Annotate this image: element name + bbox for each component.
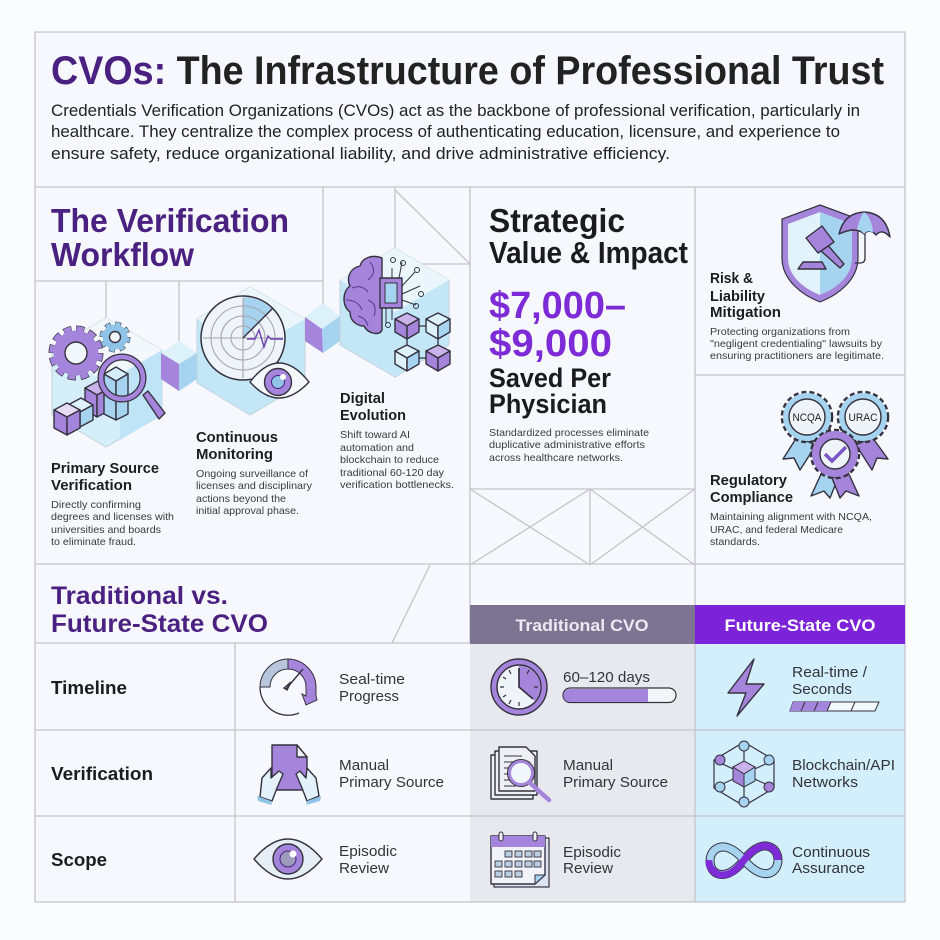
text: regulatory compliance: URAC, and federal Medicare <box>710 524 843 536</box>
text: risk and liability mitigation: Liability <box>710 289 765 305</box>
text: digital evolution: automation and <box>340 442 414 454</box>
table header: traditional CVO <box>470 605 695 644</box>
text: episodic review: Episodic <box>339 843 398 860</box>
text: digital evolution <box>340 391 454 491</box>
text: blockchain api networks: Blockchain/API <box>792 757 895 774</box>
title: CVOs: The Infrastructure of Professional Trust <box>51 49 884 93</box>
icon: accreditation badges: URAC <box>848 412 878 424</box>
stat: dollars saved per physician: Saved Per <box>489 363 611 393</box>
table header: traditional CVO: Traditional CVO <box>516 616 648 635</box>
text: continuous assurance: Assurance <box>792 860 865 877</box>
text: blockchain api networks <box>792 757 895 791</box>
stat: 60-120 days bar <box>563 669 676 702</box>
stat: real-time seconds <box>790 664 879 711</box>
heading: the verification workflow: The Verification <box>51 202 289 239</box>
text: risk and liability mitigation <box>710 271 884 362</box>
icon: connector cube two <box>305 303 340 353</box>
text: risk and liability mitigation: Mitigation <box>710 305 781 321</box>
text: risk and liability mitigation: ensuring practitioners are legitimate. <box>710 350 884 362</box>
panel: traditional column background <box>470 644 695 902</box>
text: manual primary source, traditional: Primary Source <box>563 774 668 791</box>
text: digital evolution: Shift toward AI <box>340 429 410 441</box>
row label: timeline: Timeline <box>51 678 127 698</box>
text: primary source verification <box>51 461 174 548</box>
stat: dollars saved per physician: $7,000– <box>489 285 626 327</box>
intro text: healthcare. They centralize the complex process of authenticating education, licensure, and experience to <box>51 122 840 141</box>
stat: real-time seconds: Real-time / <box>792 664 868 681</box>
stat: real-time seconds: Seconds <box>792 681 852 698</box>
text: manual primary source: Manual <box>339 757 389 774</box>
text: primary source verification: to eliminate fraud. <box>51 536 136 548</box>
text: regulatory compliance: standards. <box>710 536 760 548</box>
text: regulatory compliance: Maintaining alignment with NCQA, <box>710 511 872 523</box>
icon: calendar <box>491 832 549 887</box>
text: episodic review <box>339 843 398 877</box>
text: risk and liability mitigation: "negligent credentialing" lawsuits by <box>710 338 883 350</box>
text: strategic value description <box>489 427 649 464</box>
intro text: ensure safety, reduce organizational liability, and drive administrative efficiency. <box>51 144 670 163</box>
text: manual primary source, traditional: Manual <box>563 757 613 774</box>
table header: future-state CVO <box>695 605 905 644</box>
icon: shield, gavel and umbrella <box>782 205 890 302</box>
heading: strategic value and impact: Strategic <box>489 202 625 239</box>
text: primary source verification: Primary Source <box>51 461 159 477</box>
icon: lightning bolt <box>728 659 764 716</box>
text: risk and liability mitigation: Protecting organizations from <box>710 326 850 338</box>
text: blockchain api networks: Networks <box>792 774 858 791</box>
text: strategic value description: Standardized processes eliminate <box>489 427 649 439</box>
table header: future-state CVO: Future-State CVO <box>724 616 876 635</box>
panel: future-state column background <box>695 644 905 902</box>
icon: infinity loop <box>709 846 778 875</box>
intro text <box>51 101 860 163</box>
text: seal-time progress: Progress <box>339 688 399 705</box>
text: seal-time progress <box>339 671 405 705</box>
heading: strategic value and impact <box>489 202 688 270</box>
icon: documents with magnifier <box>491 747 549 800</box>
stat: dollars saved per physician: $9,000 <box>489 323 612 365</box>
text: episodic review, traditional: Review <box>563 860 613 877</box>
text: continuous monitoring: Monitoring <box>196 447 273 463</box>
text: seal-time progress: Seal-time <box>339 671 405 688</box>
icon: accreditation badges: NCQA <box>792 412 822 424</box>
row label: scope: Scope <box>51 850 107 870</box>
text: continuous monitoring: Continuous <box>196 430 278 446</box>
text: digital evolution: Evolution <box>340 408 406 424</box>
text: continuous monitoring: actions beyond the <box>196 493 286 505</box>
heading: strategic value and impact: Value & Impact <box>489 235 688 270</box>
text: episodic review, traditional <box>563 844 622 877</box>
text: continuous monitoring: initial approval phase. <box>196 505 299 517</box>
heading: traditional vs future-state: Future-State CVO <box>51 610 268 638</box>
text: continuous assurance: Continuous <box>792 844 870 861</box>
text: regulatory compliance: Regulatory <box>710 473 787 489</box>
text: primary source verification: Directly confirming <box>51 499 141 511</box>
text: digital evolution: traditional 60-120 day <box>340 467 445 479</box>
text: regulatory compliance <box>710 473 872 548</box>
text: manual primary source <box>339 757 444 791</box>
intro text: Credentials Verification Organizations (CVOs) act as the backbone of professional verification, particularly in <box>51 101 860 120</box>
text: episodic review: Review <box>339 860 389 877</box>
icon: blockchain network <box>714 741 774 807</box>
icon: primary source verification <box>52 318 165 447</box>
icon: accreditation badges <box>782 392 888 498</box>
text: primary source verification: Verification <box>51 478 132 494</box>
text: continuous monitoring <box>196 430 313 517</box>
icon: continuous monitoring radar <box>197 287 309 415</box>
icon: hands holding document <box>257 745 321 805</box>
heading: the verification workflow <box>51 202 289 273</box>
icon: clock <box>491 659 547 715</box>
text: continuous monitoring: Ongoing surveillance of <box>196 468 308 480</box>
text: primary source verification: universities and boards <box>51 524 161 536</box>
text: digital evolution: verification bottlenecks. <box>340 479 454 491</box>
icon: digital evolution brain and blockchain <box>340 248 450 377</box>
icon: eye <box>254 839 322 879</box>
text: manual primary source, traditional <box>563 757 668 791</box>
text: digital evolution: Digital <box>340 391 385 407</box>
text: primary source verification: degrees and licenses with <box>51 511 174 523</box>
text: strategic value description: across healthcare networks. <box>489 452 623 464</box>
text: risk and liability mitigation: Risk & <box>710 271 753 287</box>
stat: 60-120 days bar: 60–120 days <box>563 669 650 686</box>
stat: dollars saved per physician: Physician <box>489 389 607 419</box>
text: strategic value description: duplicative administrative efforts <box>489 439 645 451</box>
text: regulatory compliance: Compliance <box>710 490 793 506</box>
heading: traditional vs future-state <box>51 582 268 638</box>
heading: traditional vs future-state: Traditional vs. <box>51 582 228 610</box>
text: continuous monitoring: licenses and disciplinary <box>196 480 313 492</box>
stat: dollars saved per physician <box>489 285 626 419</box>
text: episodic review, traditional: Episodic <box>563 844 622 861</box>
text: continuous assurance <box>792 844 870 877</box>
icon: connector cube one <box>161 341 197 391</box>
heading: the verification workflow: Workflow <box>51 236 194 273</box>
icon: gauge <box>260 659 317 715</box>
text: manual primary source: Primary Source <box>339 774 444 791</box>
row label: verification: Verification <box>51 764 153 784</box>
text: digital evolution: blockchain to reduce <box>340 454 439 466</box>
